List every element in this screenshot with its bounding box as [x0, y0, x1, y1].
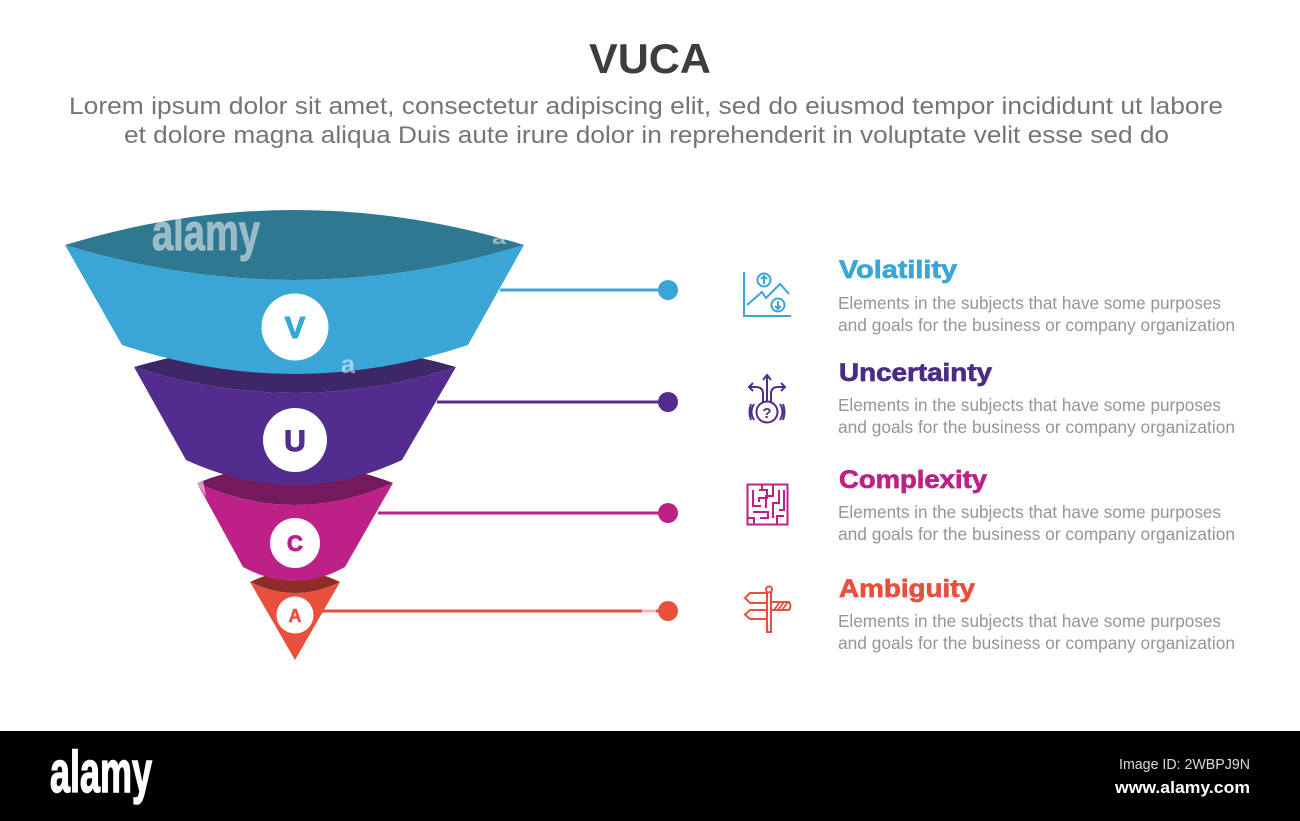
item: Volatility [838, 256, 1235, 335]
icon: maze [747, 484, 788, 525]
watermark on funnel: a [341, 349, 356, 379]
item: Volatility: and goals for the business or company organization [838, 315, 1235, 335]
item: Complexity [838, 466, 1235, 544]
item: Ambiguity: Elements in the subjects that have some purposes [838, 611, 1221, 631]
footer image id: Image ID: 2WBPJ9N [1119, 756, 1250, 773]
funnel segment: U: U [284, 425, 306, 458]
item: Volatility: Elements in the subjects that have some purposes [838, 293, 1221, 313]
title: VUCA [589, 35, 711, 82]
item: Complexity: and goals for the business or company organization [838, 524, 1235, 544]
item: Uncertainty: and goals for the business or company organization [838, 417, 1235, 437]
funnel segment: V: V [285, 310, 306, 345]
connector line: uncertainty [437, 392, 678, 412]
watermark on funnel: a [492, 228, 507, 248]
item: Complexity: Complexity [839, 466, 987, 494]
footer logo: alamy [50, 740, 152, 805]
connector line: volatility [500, 280, 678, 300]
funnel segment: U [134, 344, 456, 485]
item: Ambiguity: and goals for the business or company organization [838, 633, 1235, 653]
funnel segment: V [65, 210, 524, 374]
footer image id: www.alamy.com [1114, 778, 1250, 797]
item: Volatility: Volatility [839, 256, 957, 284]
item: Uncertainty: Elements in the subjects that have some purposes [838, 395, 1221, 415]
funnel segment: A [250, 571, 340, 660]
item: Uncertainty [838, 359, 1235, 437]
funnel segment: C: C [287, 531, 303, 556]
funnel segment: C [197, 464, 393, 581]
footer bar [0, 731, 1300, 821]
item: Uncertainty: Uncertainty [839, 359, 992, 387]
watermark on funnel [152, 204, 507, 379]
subtitle text block: et dolore magna aliqua Duis aute irure dolor in reprehenderit in voluptate velit esse sed do [124, 122, 1169, 149]
icon: chart volatility [744, 272, 791, 316]
icon: signpost [745, 586, 790, 632]
connector line: complexity [378, 503, 678, 523]
connector line: ambiguity [322, 601, 678, 621]
icon: uncertainty arrows: ? [762, 405, 772, 422]
watermark on funnel: alamy [152, 204, 260, 262]
subtitle text block: Lorem ipsum dolor sit amet, consectetur adipiscing elit, sed do eiusmod tempor incididunt ut labore [69, 93, 1223, 120]
icon: uncertainty arrows [749, 375, 785, 422]
item: Ambiguity: Ambiguity [839, 575, 975, 603]
subtitle text block [69, 93, 1223, 149]
item: Complexity: Elements in the subjects that have some purposes [838, 502, 1221, 522]
item: Ambiguity [838, 575, 1235, 653]
footer image id [1114, 756, 1250, 797]
funnel segment: A: A [288, 606, 302, 626]
